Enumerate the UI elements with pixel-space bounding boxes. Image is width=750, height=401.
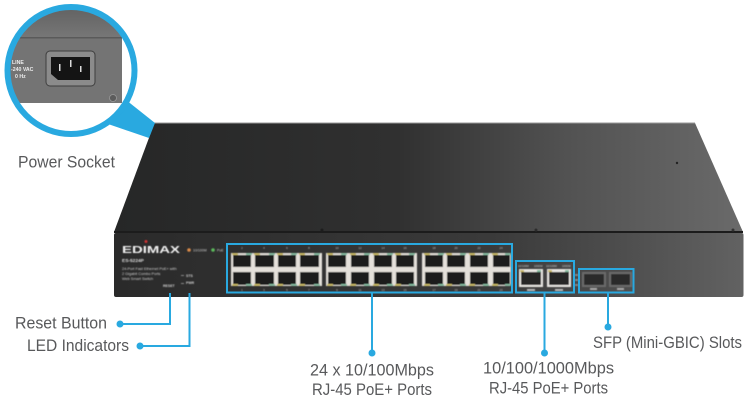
- socket rating text: 0 Hz: [15, 74, 26, 80]
- model number: ES-5224P: [122, 258, 145, 264]
- port numbers: 15: [403, 288, 407, 292]
- highlight box: 24 ports: [227, 244, 512, 292]
- leader: combo ports: [541, 293, 548, 356]
- port numbers: 17: [432, 288, 436, 292]
- status labels: 10/100M: [193, 248, 207, 252]
- logo and model text: [122, 240, 224, 288]
- port numbers: 9: [336, 288, 338, 292]
- port numbers: 12: [358, 246, 362, 250]
- logo and model text: Web Smart Switch: [122, 277, 153, 281]
- port numbers: 23: [499, 288, 503, 292]
- grounding screw: [110, 94, 116, 102]
- magnified rear panel: [10, 10, 122, 103]
- gigabit combo RJ-45 ports: 10/100M: [518, 264, 530, 268]
- socket rating text: LINE: [12, 60, 24, 66]
- port numbers: 3: [263, 288, 265, 292]
- label: LED Indicators: LED Indicators: [27, 337, 129, 355]
- port numbers: 11: [358, 288, 362, 292]
- power socket: [46, 51, 95, 86]
- label: 24 x 10/100Mbps RJ-45 PoE+ Ports: RJ-45 PoE+ Ports: [312, 381, 432, 399]
- gigabit combo RJ-45 ports: 1000M: [562, 264, 571, 268]
- port numbers: 21: [477, 288, 481, 292]
- label: 10/100/1000Mbps RJ-45 PoE+ Ports: [483, 360, 614, 398]
- leader: SFP slots: [604, 293, 612, 330]
- logo and model text: 2 Gigabit Combo Ports: [122, 272, 161, 276]
- status labels: PoE: [217, 248, 224, 252]
- socket rating text: -240 VAC: [11, 67, 34, 73]
- gigabit combo RJ-45 ports: [518, 264, 571, 291]
- port numbers: 24: [499, 246, 503, 250]
- switch chassis: [114, 122, 744, 297]
- status labels: PWR: [186, 281, 195, 285]
- highlight box: combo ports: [516, 261, 574, 292]
- port numbers: 5: [286, 288, 288, 292]
- port numbers: 18: [432, 246, 436, 250]
- port block 1: [231, 253, 322, 286]
- port block 3: [422, 253, 511, 286]
- leader: 24 ports: [368, 293, 376, 356]
- port numbers: 13: [381, 288, 385, 292]
- top cover: [114, 123, 743, 232]
- highlight box: SFP slots: [579, 269, 634, 292]
- brand logo: EDIMAX: [122, 244, 180, 256]
- port numbers: 22: [477, 246, 481, 250]
- label: 24 x 10/100Mbps RJ-45 PoE+ Ports: [310, 362, 434, 399]
- front panel: [114, 233, 744, 297]
- label: Reset Button: Reset Button: [15, 314, 107, 332]
- magnifier handle: [108, 100, 155, 138]
- label: Power Socket: Power Socket: [18, 154, 115, 172]
- leader: LED Indicators: [136, 293, 190, 350]
- port numbers: 14: [381, 246, 385, 250]
- leader: Reset Button: [116, 293, 170, 328]
- port numbers: 4: [263, 246, 265, 250]
- socket rating text: [11, 60, 34, 78]
- port numbers: 1: [241, 288, 243, 292]
- port numbers: 2: [241, 246, 243, 250]
- port numbers: 6: [286, 246, 288, 250]
- port numbers: 20: [454, 246, 458, 250]
- port numbers: [241, 246, 503, 292]
- port numbers: 16: [403, 246, 407, 250]
- port numbers: 10: [335, 246, 339, 250]
- port block 2: [326, 253, 417, 286]
- label: 24 x 10/100Mbps RJ-45 PoE+ Ports: 24 x 10/100Mbps: [310, 362, 434, 380]
- gigabit combo RJ-45 ports: 1000M: [534, 264, 543, 268]
- model description: 24-Port Fast Ethernet PoE+ with: [122, 267, 177, 271]
- port numbers: 19: [454, 288, 458, 292]
- SFP slots: [575, 272, 632, 290]
- port numbers: 7: [308, 288, 310, 292]
- magnifier ring: [8, 7, 134, 134]
- port numbers: 8: [308, 246, 310, 250]
- label: 10/100/1000Mbps RJ-45 PoE+ Ports: 10/100/1000Mbps: [483, 360, 614, 378]
- status labels: STS: [186, 274, 193, 278]
- label: 10/100/1000Mbps RJ-45 PoE+ Ports: RJ-45 PoE+ Ports: [489, 380, 608, 398]
- magnifier callout: power socket: [0, 0, 155, 140]
- gigabit combo RJ-45 ports: 10/100M: [546, 264, 558, 268]
- status labels: [163, 248, 224, 288]
- 24 RJ-45 port array: [231, 246, 511, 292]
- status labels: RESET: [163, 284, 176, 288]
